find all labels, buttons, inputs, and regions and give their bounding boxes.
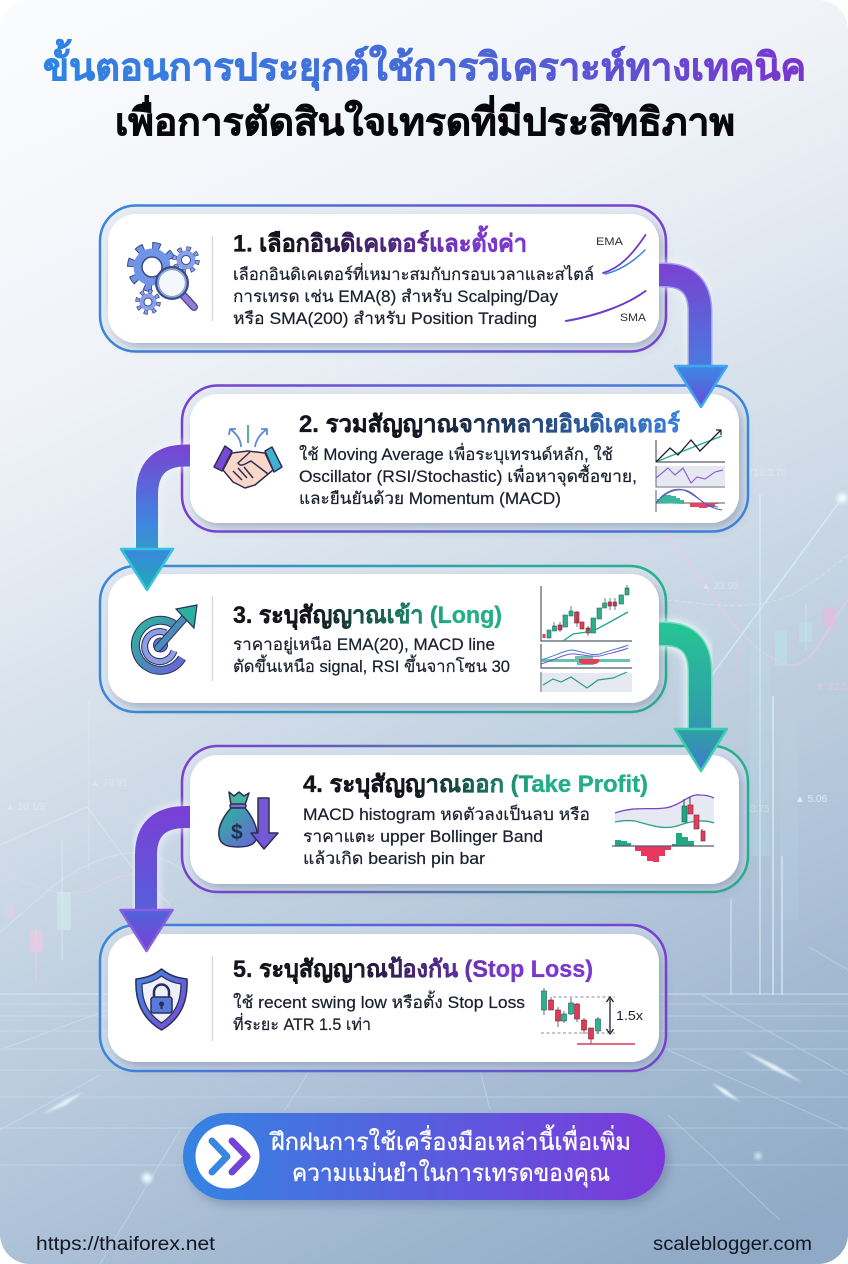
arrow: step 3 to step 4 bbox=[659, 634, 727, 771]
light streaks bbox=[43, 493, 847, 1183]
step 3 text bbox=[233, 636, 510, 676]
icon: gears and magnifier bbox=[131, 246, 198, 312]
chart: trend, oscillator, MACD bbox=[656, 430, 725, 512]
faint chart labels: ▲ 10 1/5 bbox=[5, 802, 46, 813]
panel: step 2 bbox=[182, 386, 748, 532]
step 4 heading: 4. ระบุสัญญาณออก (Take Profit) bbox=[303, 771, 648, 800]
panel: step 4 bbox=[182, 746, 748, 892]
step 2 text: และยืนยันด้วย Momentum (MACD) bbox=[299, 490, 561, 508]
step 4 text: แล้วเกิด bearish pin bar bbox=[303, 850, 486, 868]
step 2 text: Oscillator (RSI/Stochastic) เพื่อหาจุดซื้อขาย, bbox=[299, 464, 637, 487]
step 2 text bbox=[299, 443, 637, 508]
icon: double chevron bbox=[196, 1124, 260, 1188]
title line 2: เพื่อการตัดสินใจเทรดที่มีประสิทธิภาพ bbox=[115, 95, 735, 144]
step 1 heading: 1. เลือกอินดิเคเตอร์และตั้งค่า bbox=[233, 224, 527, 258]
floor grid bbox=[0, 994, 848, 1264]
faint chart labels: 716.3.70 bbox=[748, 468, 787, 479]
step 5 text: ที่ระยะ ATR 1.5 เท่า bbox=[233, 1013, 371, 1034]
step 4 text bbox=[303, 804, 590, 868]
footer: source url: https://thaiforex.net bbox=[36, 1234, 216, 1255]
step 5 text: ใช้ recent swing low หรือตั้ง Stop Loss bbox=[233, 990, 525, 1012]
faint chart labels: ▲ 5.06 bbox=[795, 794, 828, 805]
step 5 heading: 5. ระบุสัญญาณป้องกัน (Stop Loss) bbox=[233, 956, 593, 985]
chart: Bollinger band and histogram bbox=[612, 795, 714, 862]
icon: money bag with down arrow bbox=[219, 792, 278, 849]
callout text bbox=[269, 1124, 631, 1188]
step 4 text: ราคาแตะ upper Bollinger Band bbox=[303, 828, 543, 846]
step 3 text: ตัดขึ้นเหนือ signal, RSI ขึ้นจากโซน 30 bbox=[233, 654, 510, 676]
faint chart labels: ▼ 22.5 bbox=[815, 682, 848, 693]
title bbox=[43, 39, 806, 144]
step 1 text bbox=[233, 263, 594, 328]
step 2 text: ใช้ Moving Average เพื่อระบุเทรนด์หลัก, ใช้ bbox=[299, 443, 613, 465]
title line 1: ขั้นตอนการประยุกต์ใช้การวิเคราะห์ทางเทคนิค bbox=[43, 39, 806, 91]
step 5 text bbox=[233, 990, 525, 1034]
chart: EMA and SMA curves: EMA bbox=[596, 236, 624, 248]
step 3 text: ราคาอยู่เหนือ EMA(20), MACD line bbox=[233, 636, 495, 655]
faint chart labels bbox=[5, 468, 848, 815]
arrow: step 1 to step 2 bbox=[659, 275, 727, 407]
chart: EMA and SMA curves: SMA bbox=[620, 312, 647, 324]
icon: shield with padlock bbox=[136, 969, 187, 1030]
step 4 text: MACD histogram หดตัวลงเป็นลบ หรือ bbox=[303, 804, 590, 824]
faint chart labels: ▲ 23.95 bbox=[701, 581, 739, 592]
arrow: step 4 to step 5 bbox=[120, 817, 190, 951]
step 1 text: การเทรด เช่น EMA(8) สำหรับ Scalping/Day bbox=[233, 288, 559, 306]
panel: step 3 bbox=[100, 566, 666, 712]
callout: call to action button bbox=[183, 1113, 665, 1200]
chart: ATR stop loss: 1.5x bbox=[616, 1008, 644, 1023]
icon: money bag with down arrow: $ bbox=[231, 821, 243, 844]
step 1 text: หรือ SMA(200) สำหรับ Position Trading bbox=[233, 310, 537, 328]
callout text: ความแม่นยำในการเทรดของคุณ bbox=[292, 1159, 610, 1188]
faint chart labels: 3.75 bbox=[750, 804, 770, 815]
panel: step 5 bbox=[100, 925, 666, 1071]
step 3 heading: 3. ระบุสัญญาณเข้า (Long) bbox=[233, 602, 502, 631]
step 1 text: เลือกอินดิเคเตอร์ที่เหมาะสมกับกรอบเวลาและสไตล์ bbox=[233, 263, 594, 284]
callout text: ฝึกฝนการใช้เครื่องมือเหล่านี้เพื่อเพิ่ม bbox=[269, 1124, 631, 1156]
chart: EMA and SMA curves bbox=[566, 235, 647, 324]
arrow: step 2 to step 3 bbox=[121, 456, 190, 590]
chart: ATR stop loss bbox=[541, 988, 644, 1044]
faint chart labels: ▲ 70.91 bbox=[90, 778, 128, 789]
step 2 heading: 2. รวมสัญญาณจากหลายอินดิเคเตอร์ bbox=[299, 410, 680, 438]
icon: target with arrow bbox=[135, 605, 197, 670]
panel: step 1 bbox=[100, 206, 666, 352]
chart: long entry candles bbox=[541, 585, 632, 692]
footer: credit: scaleblogger.com bbox=[653, 1234, 812, 1255]
icon: handshake bbox=[214, 425, 282, 488]
